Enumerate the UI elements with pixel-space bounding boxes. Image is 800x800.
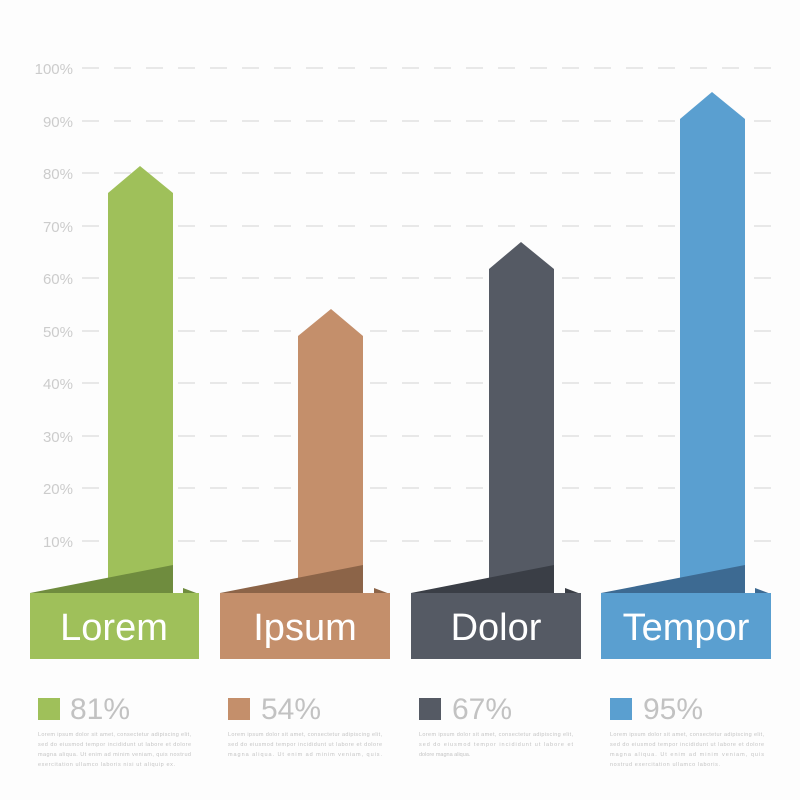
bar: Ipsum (220, 309, 390, 659)
legend: Tempor 95% (610, 693, 764, 768)
legend: Lorem 81%: magna aliqua. Ut enim ad minim veniam, quis nostrud (38, 752, 191, 758)
legend: Ipsum 54%: 54% (261, 693, 321, 726)
y-axis labels: 20% (43, 481, 73, 498)
bar: Ipsum: Ipsum (253, 607, 357, 649)
bar: Tempor: Tempor (623, 607, 750, 649)
legend: Dolor 67%: dolore magna aliqua. (419, 752, 471, 758)
legend: Dolor 67%: Lorem ipsum dolor sit amet, consectetur adipiscing elit, (419, 732, 573, 738)
legend: Lorem 81%: sed do eiusmod tempor incididunt ut labore et dolore (38, 742, 191, 748)
legend: Tempor 95%: Lorem ipsum dolor sit amet, consectetur adipiscing elit, (610, 732, 764, 738)
bar: Tempor (601, 92, 771, 659)
legend: Lorem 81%: 81% (70, 693, 130, 726)
legend: Ipsum 54%: magna aliqua. Ut enim ad minim veniam, quis. (228, 752, 382, 758)
bar: Lorem: Lorem (60, 607, 168, 649)
legend: Lorem 81% (38, 693, 191, 768)
y-axis labels: 80% (43, 166, 73, 183)
legend: Ipsum 54%: sed do eiusmod tempor incididunt ut labore et dolore (228, 742, 382, 748)
legend: Lorem 81%: Lorem ipsum dolor sit amet, consectetur adipiscing elit, (38, 732, 191, 738)
y-axis labels: 70% (43, 219, 73, 236)
y-axis labels: 10% (43, 534, 73, 551)
bar: Dolor (411, 242, 581, 659)
legend: Tempor 95%: sed do eiusmod tempor incididunt ut labore et dolore (610, 742, 764, 748)
legend: Dolor 67%: sed do eiusmod tempor incididunt ut labore et (419, 742, 573, 748)
legend: Lorem 81%: exercitation ullamco laboris nisi ut aliquip ex. (38, 762, 175, 768)
y-axis labels: 40% (43, 376, 73, 393)
legend: Tempor 95%: 95% (643, 693, 703, 726)
y-axis labels (35, 61, 73, 551)
bar: Dolor: Dolor (451, 607, 542, 649)
bar: Lorem (30, 166, 199, 659)
y-axis labels: 60% (43, 271, 73, 288)
y-axis labels: 30% (43, 429, 73, 446)
legend: Tempor 95%: magna aliqua. Ut enim ad minim veniam, quis (610, 752, 764, 758)
legend: Ipsum 54% (228, 693, 382, 758)
legend: Tempor 95%: nostrud exercitation ullamco laboris. (610, 762, 720, 768)
y-axis labels: 100% (35, 61, 73, 78)
legend: Ipsum 54%: Lorem ipsum dolor sit amet, consectetur adipiscing elit, (228, 732, 382, 738)
legend: Dolor 67% (419, 693, 573, 758)
y-axis labels: 50% (43, 324, 73, 341)
y-axis labels: 90% (43, 114, 73, 131)
legend: Dolor 67%: 67% (452, 693, 512, 726)
